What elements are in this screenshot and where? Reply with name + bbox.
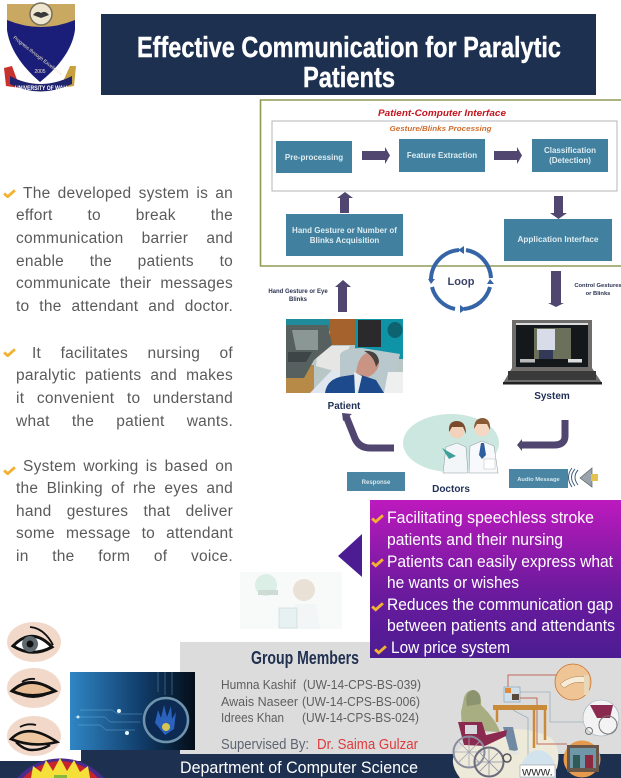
member names: (UW-14-CPS-BS-006): [302, 695, 420, 709]
label: control gestures or blinks: [574, 283, 621, 297]
heading: patient-computer interface: Patient-Computer Interface: [378, 108, 507, 119]
illustration: faded doctor: [240, 572, 342, 629]
member names: (UW-14-CPS-BS-039): [303, 678, 421, 692]
benefit two: he wants or wishes: [387, 573, 519, 592]
member names: [221, 678, 421, 725]
icon: pointer triangle: [338, 534, 362, 577]
text block: system effort: to the attendant and doctor.: [16, 298, 233, 315]
label: patient: Patient: [328, 401, 361, 412]
supervisor line: Dr. Saima Gulzar: [317, 736, 418, 753]
panel: group members: [180, 642, 621, 754]
member names: Awais Naseer: [221, 695, 298, 709]
illustration: doctors: [403, 414, 499, 473]
icon: open eye: [7, 622, 61, 662]
logo: department sun emblem: [17, 758, 104, 778]
logo: University of Wah crest: UNIVERSITY OF WAH: [15, 86, 67, 92]
footer bar: [0, 750, 621, 778]
sub-panel: gesture and blinks processing: Gesture/Blinks Processing: [390, 124, 492, 133]
sub-panel: gesture and blinks processing: Classification: [544, 146, 596, 155]
text block: system working: [3, 458, 233, 565]
text block: system working: hand gestures that deliver: [16, 503, 233, 520]
text block: nursing: [3, 345, 233, 430]
text block: nursing: what the patient wants.: [16, 413, 233, 430]
supervisor line: [221, 736, 418, 753]
label: system: System: [534, 391, 570, 402]
benefit three: [372, 595, 615, 635]
arrow: processing down to application: [550, 196, 567, 219]
label: control gestures or blinks: or Blinks: [586, 291, 610, 297]
text block: system effort: effort to break the: [16, 207, 233, 224]
member names: Humna Kashif: [221, 678, 296, 692]
text block: system effort: enable the patients to: [16, 253, 233, 270]
icon: half closed eye: [7, 668, 61, 708]
member names: Idrees Khan: [221, 711, 284, 725]
text block: system working: some message to attendant: [16, 525, 233, 542]
icon: speaker: [568, 468, 598, 487]
box: audio message: Audio Message: [517, 477, 561, 483]
arrow: interface down to system: [548, 271, 564, 307]
box: response: Response: [362, 480, 391, 486]
illustration: wheelchair user at computer: [453, 664, 619, 778]
arrow: system to doctors: [517, 420, 565, 451]
logo: University of Wah crest: [4, 3, 76, 92]
icon: loop cycle: Loop: [448, 276, 475, 288]
title banner: Patients: [303, 62, 395, 94]
title banner: [101, 14, 596, 95]
label: hand gesture or eye blinks: Blinks: [289, 297, 308, 303]
label: doctors: Doctors: [432, 484, 470, 495]
arrow: doctors to patient: [342, 413, 394, 448]
text block: nursing: paralytic patients and makes: [16, 367, 233, 384]
panel: patient-computer interface: [260, 100, 621, 266]
arrow: acquisition up to processing: [337, 192, 353, 213]
text block: system working: the Blinking of rhe eyes and: [16, 480, 233, 497]
text block: system effort: communicate their messages: [16, 275, 233, 292]
label: control gestures or blinks: Control Gestures: [574, 283, 621, 289]
benefit one: Facilitating speechless stroke: [387, 508, 594, 527]
image: digital hand technology: [70, 672, 195, 750]
box: hand gesture acquisition: Hand Gesture or Number of: [292, 226, 397, 235]
supervisor line: Supervised By:: [221, 736, 309, 753]
box: application interface: Application Interface: [518, 235, 599, 244]
icon: check: [3, 189, 16, 198]
box: hand gesture acquisition: [286, 214, 403, 256]
text block: system effort: The developed system is an: [23, 185, 233, 202]
text block: system working: in the form of voice.: [16, 548, 233, 565]
logo: University of Wah crest: Progress through Excellence: [12, 35, 64, 78]
text block: system effort: communication barrier and: [16, 230, 233, 247]
text block: system working: System working is based on: [23, 458, 233, 475]
panel: benefits: [370, 500, 621, 658]
text block: nursing: It facilitates nursing of: [32, 345, 233, 362]
text block: nursing: it convenient to understand: [16, 390, 233, 407]
text block: system effort: [3, 185, 233, 315]
heading: group members: Group Members: [251, 648, 359, 668]
label: hand gesture or eye blinks: Hand Gesture or Eye: [268, 289, 328, 295]
logo: University of Wah crest: 2005: [34, 69, 46, 75]
sub-panel: gesture and blinks processing: [272, 121, 617, 191]
footer bar: Department of Computer Science: [180, 758, 418, 777]
benefit two: [372, 552, 613, 592]
icon: check: [3, 348, 16, 357]
box: application interface: [504, 219, 612, 261]
box: hand gesture acquisition: Blinks Acquisition: [310, 236, 379, 245]
box: response: [347, 472, 405, 491]
sub-panel: gesture and blinks processing: Feature Extraction: [407, 151, 477, 160]
benefit one: patients and their nursing: [387, 530, 563, 549]
member names: (UW-14-CPS-BS-024): [302, 711, 419, 725]
sub-panel: gesture and blinks processing: Pre-processing: [285, 153, 343, 162]
icon: check: [3, 466, 16, 475]
box: audio message: [509, 469, 568, 488]
label: hand gesture or eye blinks: [268, 289, 328, 303]
icon: closed eye: [7, 716, 61, 756]
image: laptop showing system: [503, 320, 602, 384]
image: patient in bed: [286, 319, 403, 393]
sub-panel: gesture and blinks processing: (Detection): [549, 156, 591, 165]
benefit one: [372, 508, 594, 549]
icon: loop cycle: [428, 246, 494, 313]
arrow: patient up to interface: [335, 280, 351, 312]
benefit four: Low price system: [391, 638, 510, 657]
